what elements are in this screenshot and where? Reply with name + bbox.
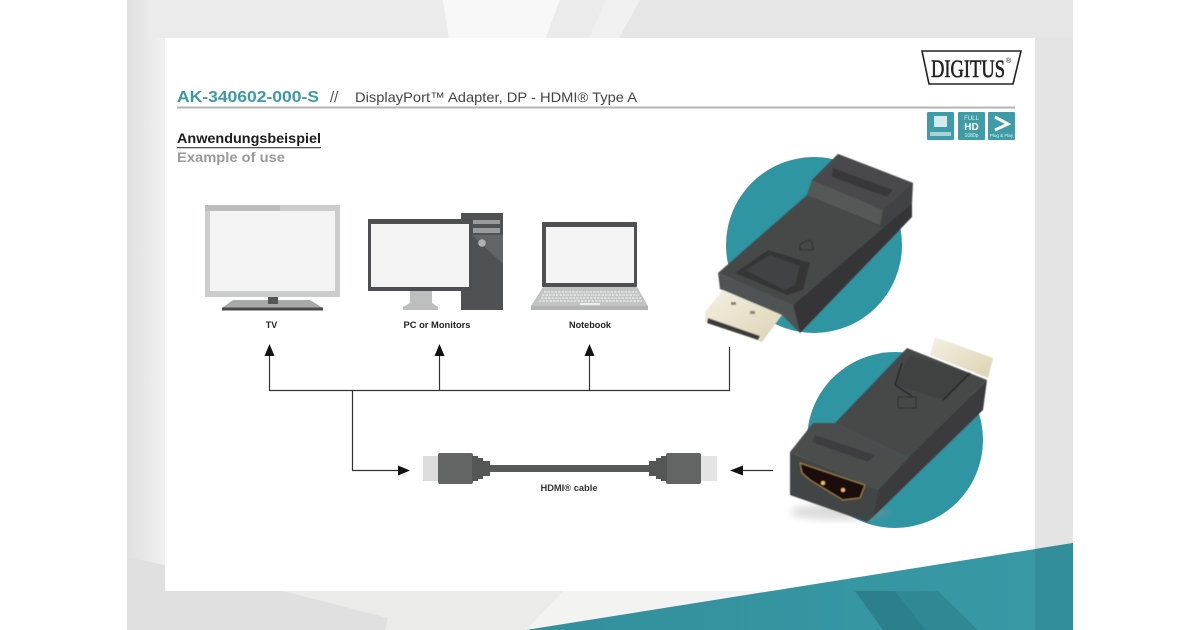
DP logo bbox=[800, 241, 813, 250]
icon: PC and monitor bbox=[368, 213, 503, 310]
logo: DIGITUS: DIGITUS bbox=[931, 56, 1005, 83]
plug bbox=[930, 337, 993, 378]
product photo: DP adapter, top bbox=[705, 154, 913, 342]
slide background bbox=[127, 0, 1073, 630]
body front bbox=[718, 273, 800, 333]
teal circle bbox=[726, 157, 902, 333]
connector arrows bbox=[264, 344, 773, 476]
body top bbox=[835, 348, 987, 458]
badge: storage bbox=[927, 112, 954, 140]
cap front bbox=[790, 452, 878, 522]
title rule bbox=[177, 106, 1015, 108]
title: DisplayPort™ Adapter, DP - HDMI® Type A bbox=[355, 89, 638, 105]
badge: full hd bbox=[958, 112, 985, 140]
teal corner band bbox=[526, 543, 1073, 630]
badge: full hd: 1080p bbox=[965, 133, 979, 139]
latch bbox=[895, 355, 970, 400]
cap top bbox=[790, 423, 908, 490]
teal circle bbox=[807, 352, 983, 528]
body top bbox=[718, 195, 912, 305]
cap bbox=[807, 154, 913, 228]
HDMI port bbox=[800, 463, 865, 500]
white content panel bbox=[165, 38, 1035, 591]
feature badges bbox=[927, 112, 1015, 140]
title: // bbox=[330, 89, 339, 106]
icon: HDMI cable bbox=[423, 453, 717, 484]
label: HDMI cable: HDMI® cable bbox=[540, 483, 598, 493]
plug bbox=[705, 290, 782, 342]
label: PC or Monitors: PC or Monitors bbox=[404, 320, 470, 330]
badge: full hd: HD bbox=[964, 122, 979, 133]
subheading: Example of use: Example of use bbox=[177, 149, 285, 165]
logo: DIGITUS bbox=[922, 51, 1021, 84]
badge: plug and play: Plug & Play bbox=[990, 133, 1014, 138]
product photo: HDMI adapter, bottom bbox=[790, 337, 993, 528]
title bbox=[177, 89, 638, 106]
body side bbox=[873, 380, 987, 517]
latch bbox=[735, 250, 810, 295]
badge: full hd: FULL bbox=[964, 116, 979, 122]
title: AK-340602-000-S bbox=[177, 89, 319, 106]
icon: notebook bbox=[531, 222, 648, 310]
label: TV: TV bbox=[266, 320, 277, 330]
DP logo bbox=[898, 397, 916, 408]
heading: Anwendungsbeispiel: Anwendungsbeispiel bbox=[177, 130, 321, 146]
body side bbox=[793, 203, 912, 333]
icon: TV bbox=[205, 205, 340, 310]
logo: DIGITUS: ® bbox=[1006, 57, 1012, 65]
label: Notebook: Notebook bbox=[569, 320, 612, 330]
